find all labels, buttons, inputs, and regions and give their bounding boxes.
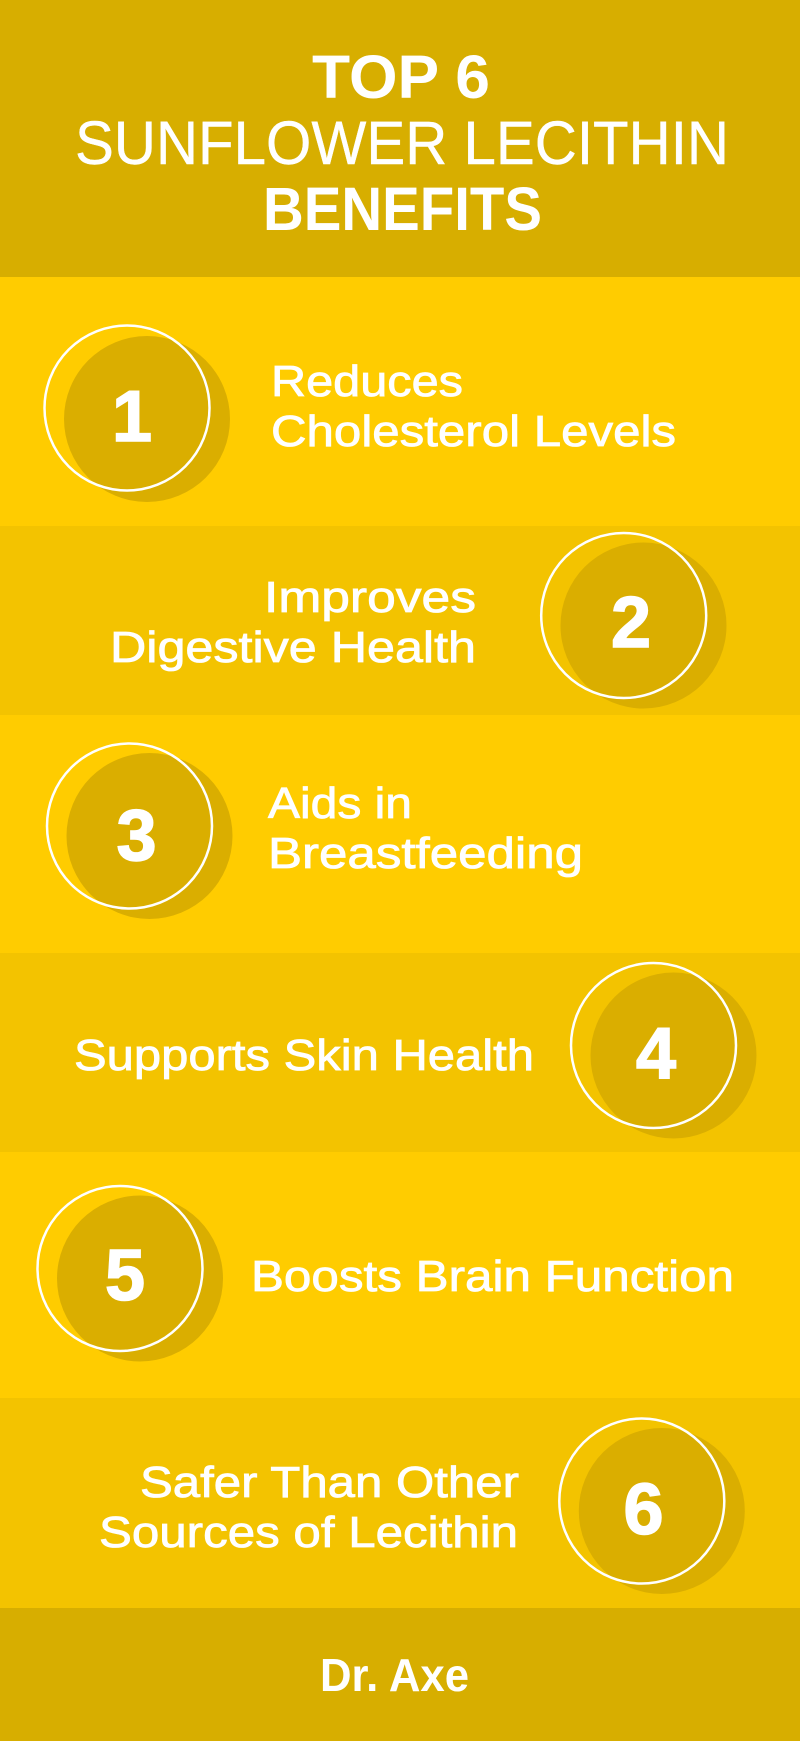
- icon: number 3 badge: 3: [116, 796, 157, 876]
- text: improves digestive health: [110, 573, 476, 672]
- title: [75, 43, 729, 243]
- text: boosts brain function: Boosts Brain Function: [251, 1252, 734, 1301]
- icon: number 4 badge: [571, 963, 756, 1138]
- panel: header: [0, 0, 800, 277]
- icon: number 5 badge: 5: [105, 1236, 145, 1316]
- text: supports skin health: Supports Skin Health: [74, 1031, 534, 1080]
- text: improves digestive health: Improves: [264, 573, 476, 622]
- panel: benefit 2: [0, 526, 800, 715]
- text: reduces cholesterol levels: [271, 357, 676, 456]
- icon: number 6 badge: 6: [623, 1470, 664, 1550]
- icon: number 4 badge: 4: [636, 1014, 676, 1094]
- icon: number 6 badge: [559, 1418, 745, 1594]
- title: TOP 6: [312, 43, 490, 111]
- panel: footer: [0, 1608, 800, 1741]
- text: safer than other sources of lecithin: Safer Than Other: [140, 1458, 519, 1507]
- text: safer than other sources of lecithin: [99, 1458, 519, 1557]
- logo: Dr. Axe: Dr. Axe: [320, 1649, 469, 1701]
- icon: number 5 badge: [38, 1186, 223, 1362]
- icon: number 2 badge: [541, 533, 726, 708]
- icon: number 3 badge: [47, 744, 232, 919]
- text: improves digestive health: Digestive Health: [110, 623, 476, 672]
- title: BENEFITS: [263, 175, 542, 243]
- icon: number 2 badge: 2: [611, 583, 651, 663]
- panel: benefit 3: [0, 715, 800, 953]
- panel: benefit 5: [0, 1152, 800, 1398]
- text: aids in breastfeeding: [268, 779, 583, 878]
- text: reduces cholesterol levels: Cholesterol Levels: [271, 407, 676, 456]
- text: aids in breastfeeding: Aids in: [268, 779, 412, 828]
- title: SUNFLOWER LECITHIN: [75, 109, 729, 177]
- icon: number 1 badge: [44, 326, 230, 502]
- text: safer than other sources of lecithin: Sources of Lecithin: [99, 1508, 518, 1557]
- text: reduces cholesterol levels: Reduces: [271, 357, 463, 406]
- panel: benefit 4: [0, 953, 800, 1152]
- panel: benefit 1: [0, 277, 800, 526]
- panel: benefit 6: [0, 1398, 800, 1608]
- text: aids in breastfeeding: Breastfeeding: [268, 829, 583, 878]
- icon: number 1 badge: 1: [112, 377, 152, 457]
